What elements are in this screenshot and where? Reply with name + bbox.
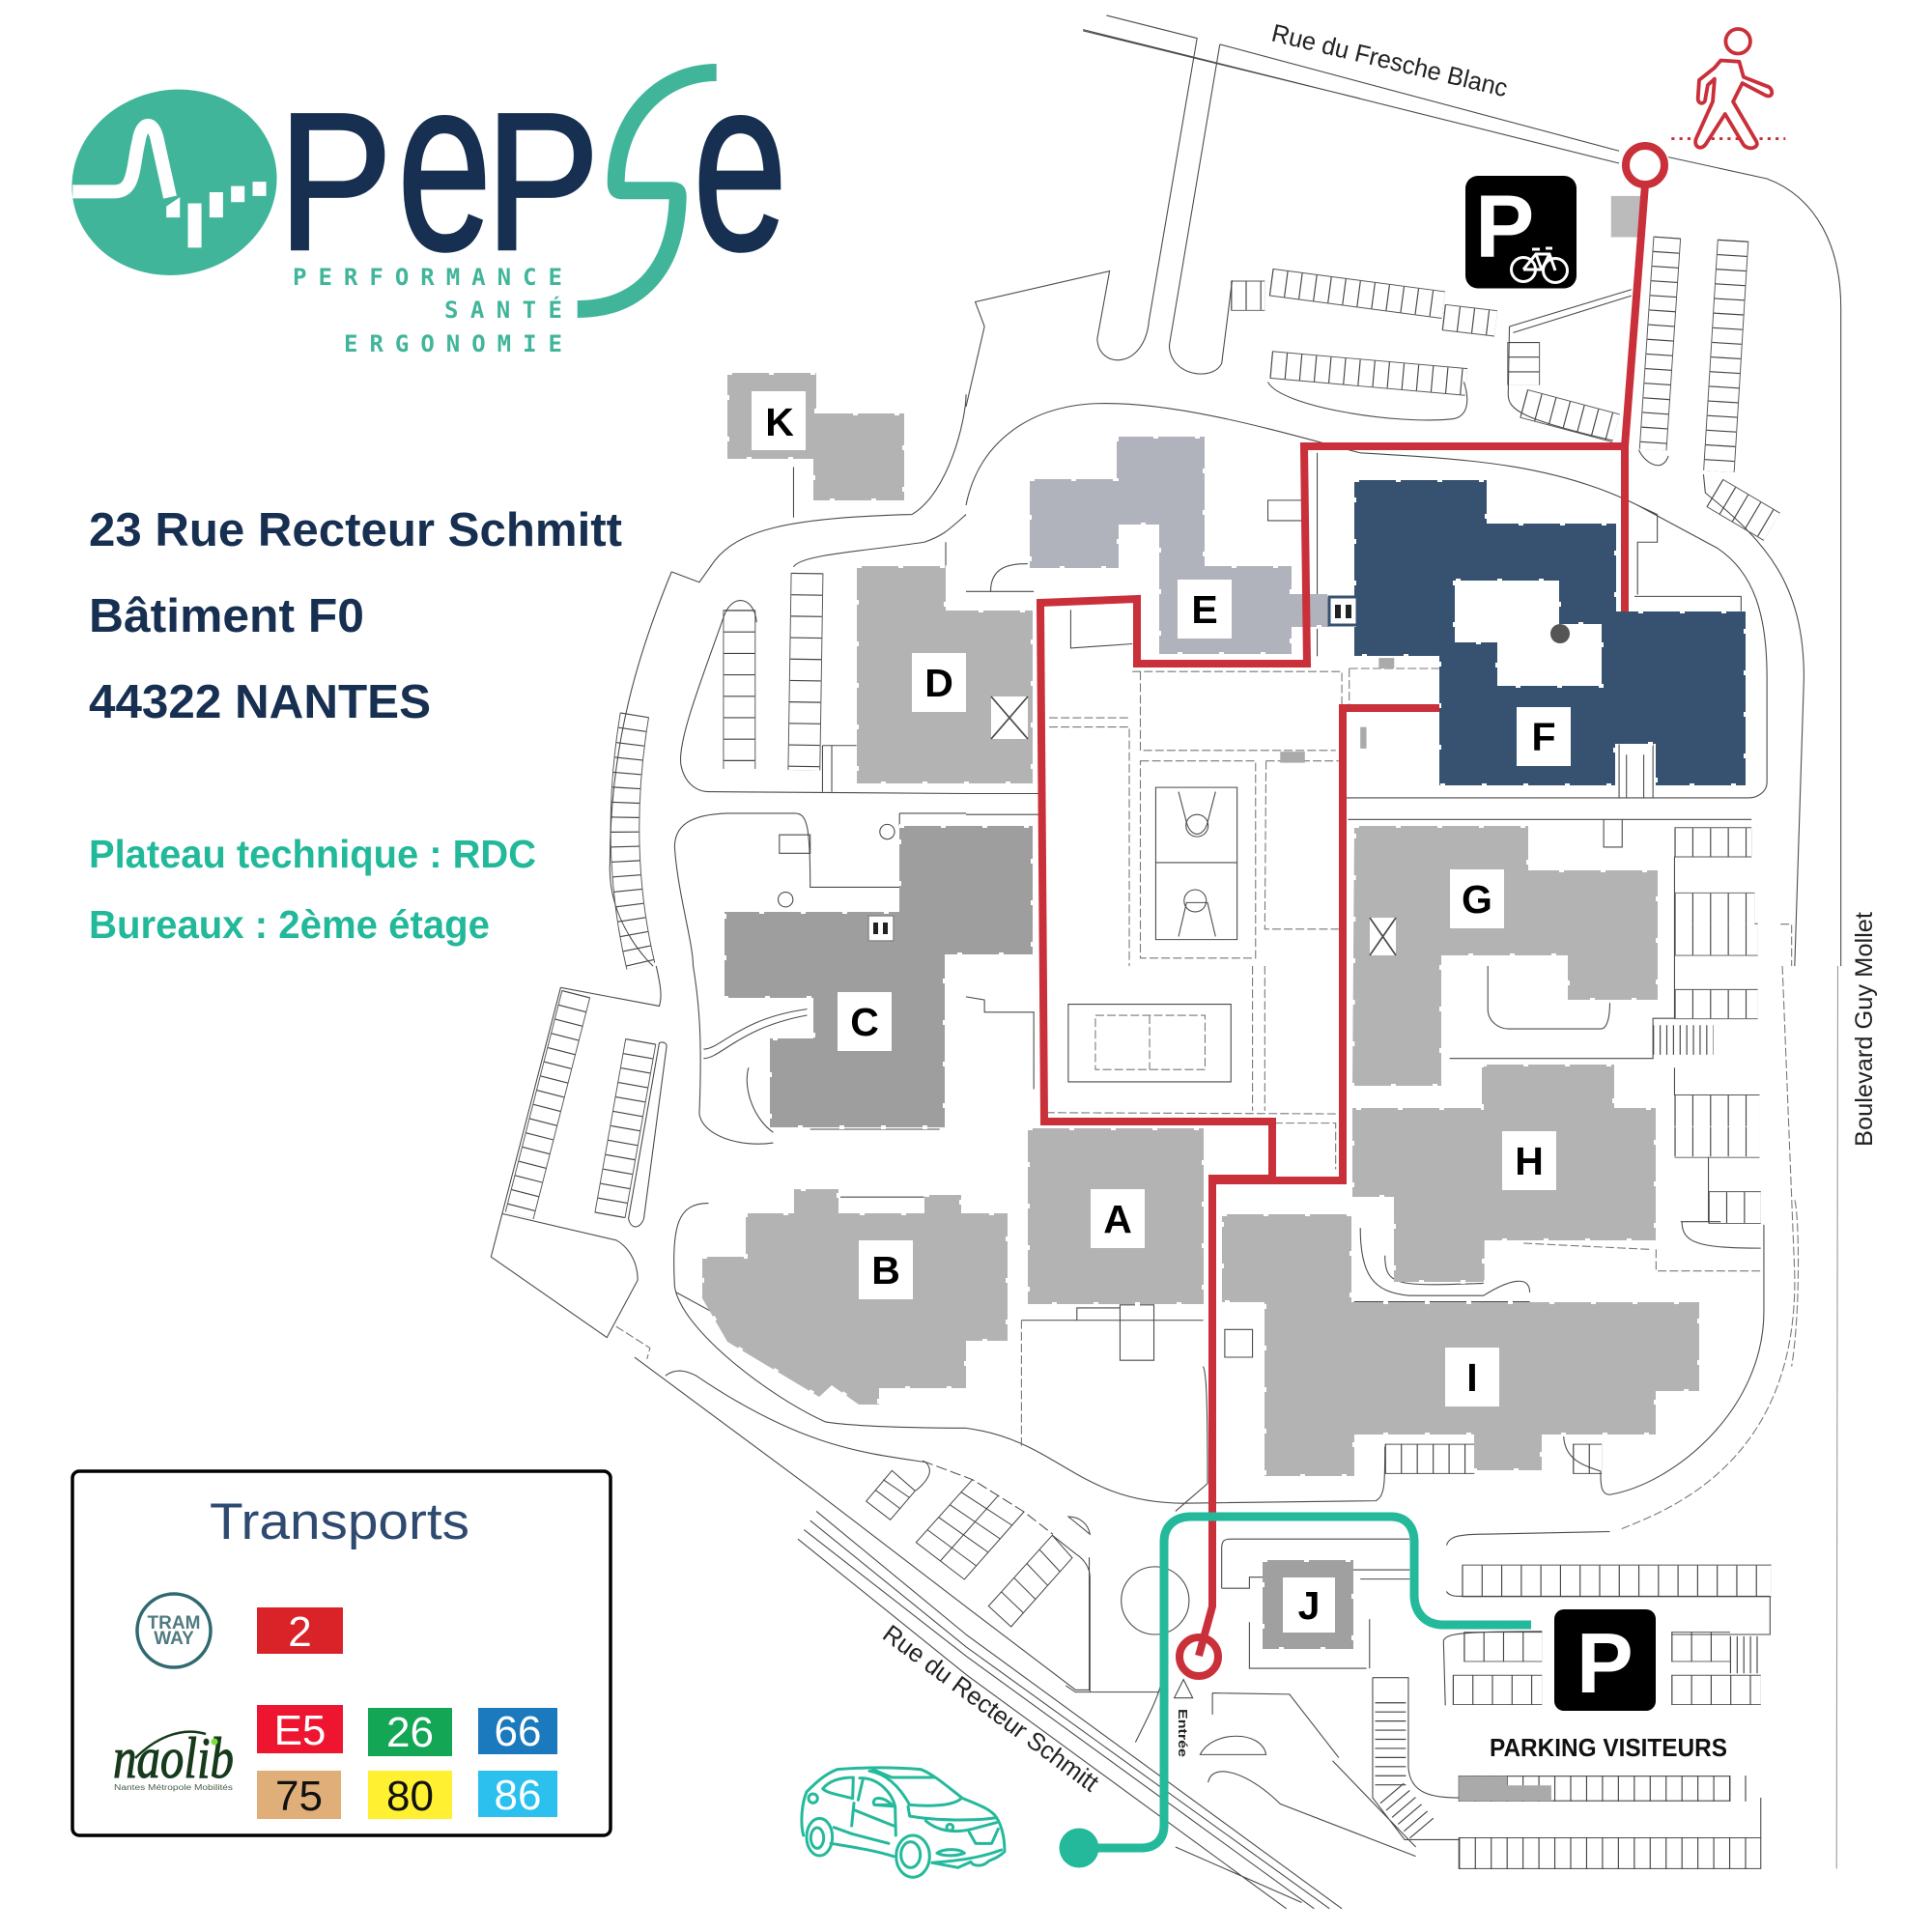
address block: Bâtiment F0: [89, 590, 364, 642]
street label: Rue du Recteur Schmitt: Rue du Recteur Schmitt: [877, 1619, 1105, 1798]
icon: tramway: [137, 1594, 211, 1667]
street label: Boulevard Guy Mollet: Boulevard Guy Mollet: [1851, 912, 1878, 1147]
address block: [89, 504, 622, 728]
logo swoosh letter S: [578, 72, 717, 309]
icon: bike parking: [1465, 176, 1577, 288]
floor information: [89, 832, 536, 947]
building K: [727, 373, 904, 500]
panel: transports legend: [72, 1471, 611, 1835]
bus line 80 badge: 80: [386, 1773, 434, 1820]
building A: [1028, 1128, 1204, 1304]
bus line 66 badge: [478, 1708, 557, 1755]
legend heading: Transports: [210, 1493, 469, 1550]
logo wordmark letters: e: [397, 25, 492, 302]
icon: elevator building C: [868, 916, 894, 941]
building C: [724, 826, 1033, 1127]
building F, destination: F: [1531, 715, 1556, 759]
tram line 2 badge: [257, 1607, 343, 1656]
building G: G: [1462, 877, 1492, 922]
building K: K: [765, 400, 794, 444]
logo tagline: PERFORMANCE: [293, 264, 562, 291]
icon: tramway: TRAM: [148, 1613, 200, 1634]
building I: I: [1466, 1355, 1478, 1400]
bus line E5 badge: E5: [274, 1707, 326, 1754]
icon: elevator building F: [1329, 597, 1357, 625]
icon: pedestrian: [1671, 29, 1785, 148]
logo: naolib: naolib: [113, 1726, 234, 1790]
diagonal parking bays: [867, 1461, 1159, 1692]
bus line 66 badge: 66: [495, 1708, 541, 1755]
floor information: Bureaux : 2ème étage: [89, 902, 490, 947]
bus line 75 badge: [257, 1771, 341, 1820]
building G: [1352, 826, 1658, 1086]
building H: [1352, 1065, 1656, 1282]
logo wordmark letters: P: [278, 71, 393, 292]
bus line 80 badge: [368, 1771, 452, 1820]
bus line 86 badge: 86: [495, 1772, 541, 1819]
icon: car parking: [1554, 1609, 1656, 1711]
building F, destination: [1354, 480, 1746, 785]
label: parking visiteurs: PARKING VISITEURS: [1490, 1733, 1727, 1762]
logo: PEPSE: [54, 25, 787, 357]
bus line 26 badge: 26: [386, 1709, 434, 1756]
logo wordmark letters: e: [693, 25, 787, 302]
panel: buildings: [702, 373, 1746, 1649]
label: Entrée: Entrée: [1176, 1709, 1190, 1757]
icon: bike parking: P: [1475, 178, 1534, 276]
logo tagline: ERGONOMIE: [344, 330, 562, 357]
building E: E: [1191, 587, 1218, 632]
street label: Rue du Fresche Blanc: Rue du Fresche Blanc: [1269, 18, 1511, 102]
building B: [702, 1189, 1008, 1405]
logo tagline: SANTÉ: [444, 296, 562, 324]
building I: [1222, 1214, 1699, 1476]
bus line 86 badge: [478, 1771, 557, 1819]
logo emblem: [54, 71, 295, 295]
bus line E5 badge: [257, 1705, 343, 1754]
icon: car: [802, 1768, 1005, 1877]
building J: [1263, 1560, 1353, 1649]
logo tagline: [293, 264, 562, 357]
icon: tramway: WAY: [154, 1629, 194, 1649]
logo wordmark letters: P: [485, 71, 600, 292]
logo: naolib: Nantes Métropole Mobilités: [114, 1783, 233, 1792]
site plan linework: [491, 15, 1841, 1909]
building C: C: [850, 1000, 879, 1044]
teal driving route: [1059, 1517, 1531, 1868]
building E: [1030, 437, 1329, 654]
building J: J: [1298, 1583, 1320, 1628]
building D: [857, 566, 1033, 783]
parking letter P: P: [1577, 1615, 1634, 1711]
tram line 2 badge: 2: [288, 1608, 312, 1656]
building H: H: [1515, 1139, 1544, 1183]
address block: 23 Rue Recteur Schmitt: [89, 504, 622, 556]
logo wordmark letters: [278, 25, 787, 302]
bus line 26 badge: [368, 1708, 452, 1756]
building A: A: [1103, 1197, 1132, 1241]
red walking route: [1040, 146, 1664, 1676]
address block: 44322 NANTES: [89, 676, 431, 728]
bus line 75 badge: 75: [275, 1773, 323, 1820]
building D: D: [924, 661, 953, 705]
building B: B: [871, 1248, 900, 1293]
floor information: Plateau technique : RDC: [89, 832, 536, 876]
